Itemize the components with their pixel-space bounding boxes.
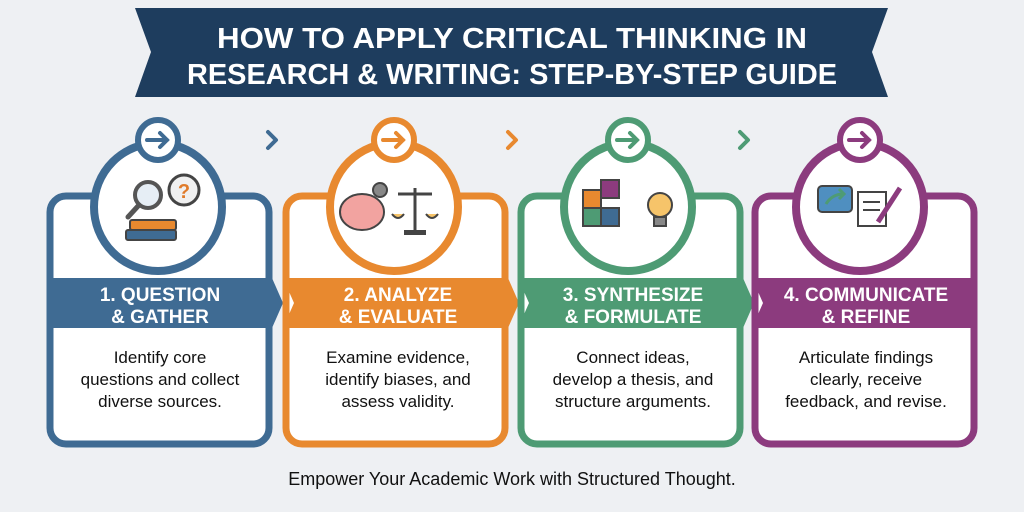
panel: step 1: ?	[178, 181, 190, 203]
panel: step 2: 2. ANALYZE	[344, 285, 452, 306]
panel: step 2: assess validity.	[341, 392, 455, 411]
panel: step 3: structure arguments.	[555, 392, 711, 411]
arrow: chevron 3	[740, 132, 748, 148]
footer tagline: Empower Your Academic Work with Structured Thought.	[288, 469, 736, 489]
panel: step 3: 3. SYNTHESIZE	[563, 285, 703, 306]
panel: step 4: Articulate findings	[799, 348, 933, 367]
panel: step 1: & GATHER	[111, 307, 209, 328]
panel: step 4: clearly, receive	[810, 370, 922, 389]
panel: step 1: diverse sources.	[98, 392, 222, 411]
panel: step 3	[518, 120, 754, 444]
panel: step 3: develop a thesis, and	[553, 370, 713, 389]
panel: step 2	[283, 120, 519, 444]
panel: step 2: Examine evidence,	[326, 348, 470, 367]
panel: step 4: feedback, and revise.	[785, 392, 947, 411]
panel: step 1	[47, 120, 283, 444]
title	[135, 8, 888, 97]
arrow: chevron 2	[508, 132, 516, 148]
panel: step 1: questions and collect	[81, 370, 240, 389]
panel: step 2: identify biases, and	[325, 370, 471, 389]
panel: step 2: & EVALUATE	[339, 307, 457, 328]
panel: step 1: 1. QUESTION	[100, 285, 220, 306]
panel: step 4: & REFINE	[822, 307, 910, 328]
panel: step 1: Identify core	[114, 348, 206, 367]
title: HOW TO APPLY CRITICAL THINKING IN	[217, 23, 807, 55]
panel: step 4: 4. COMMUNICATE	[784, 285, 948, 306]
panel: step 4	[752, 120, 977, 444]
panel: step 3: & FORMULATE	[565, 307, 701, 328]
panel: step 3: Connect ideas,	[576, 348, 690, 367]
arrow: chevron 1	[268, 132, 276, 148]
title: RESEARCH & WRITING: STEP-BY-STEP GUIDE	[187, 59, 837, 91]
